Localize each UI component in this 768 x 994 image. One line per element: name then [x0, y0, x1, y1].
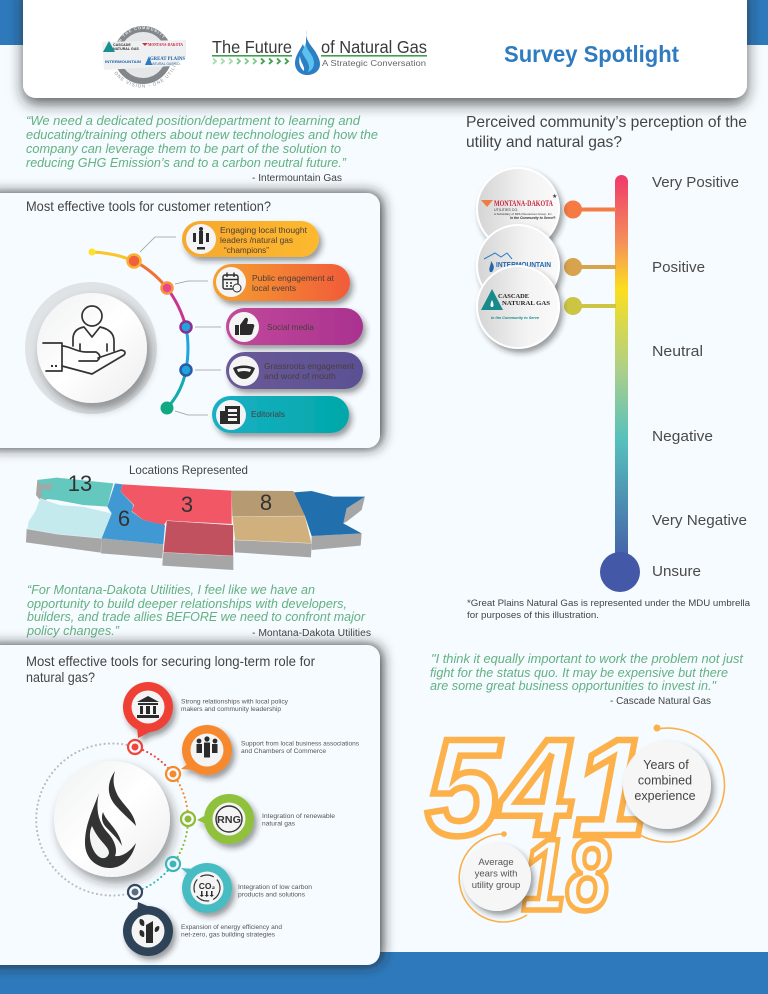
item: grassroots engagement: Grassroots engagement	[264, 361, 355, 371]
map: states represented	[26, 478, 365, 570]
state: minnesota	[294, 491, 365, 536]
heading: securing long-term role	[26, 653, 315, 685]
item: renewable natural gas: natural gas	[262, 820, 295, 828]
scale labels: Neutral	[652, 343, 703, 360]
heading: securing long-term role: Most effective tools for securing long-term role for	[26, 653, 315, 669]
quote: cascade natural gas	[430, 651, 744, 707]
stat: 541 years of combined experience: experience	[634, 789, 696, 803]
logo: utility group seal: MONTANA-DAKOTA	[148, 42, 183, 47]
marker: montana-dakota: MONTANA-DAKOTA	[494, 199, 553, 208]
quote: cascade natural gas: - Cascade Natural Gas	[610, 696, 711, 707]
logo: utility group seal: INTERMOUNTAIN	[105, 59, 141, 64]
state: south dakota	[232, 516, 312, 543]
logo: the future of natural gas: of Natural Gas	[321, 37, 427, 57]
item: social media	[226, 308, 363, 345]
node markers	[128, 740, 195, 899]
stat: 541 years of combined experience: Years of	[643, 758, 689, 772]
heading: customer retention: Most effective tools for customer retention?	[26, 198, 271, 214]
logo: utility group seal: NATURAL GAS CO.	[150, 62, 181, 66]
stat: 541 years of combined experience: 541	[426, 711, 648, 865]
map value: 6: 6	[118, 506, 130, 531]
heading: perceived perception	[466, 114, 747, 151]
timeline arc	[88, 248, 192, 414]
quote: cascade natural gas: fight for the status quo. It may be expensive but there	[430, 665, 728, 680]
heading: securing long-term role: natural gas?	[26, 669, 95, 685]
logo: utility group seal: NATURAL GAS	[113, 47, 139, 51]
item: renewable natural gas: Integration of renewable	[262, 813, 335, 820]
marker: cascade natural gas: CASCADE	[498, 293, 529, 300]
heading: perceived perception: Perceived community’s perception of the	[466, 114, 747, 131]
connectors	[140, 237, 221, 415]
item: renewable natural gas: RNG	[217, 815, 241, 826]
item: thought leaders: leaders /natural gas	[220, 235, 293, 245]
item: energy efficiency	[123, 902, 282, 956]
top blue band	[0, 0, 768, 45]
chart: perception scale	[477, 168, 747, 592]
item: social media: Social media	[267, 322, 314, 332]
map value: 3: 3	[181, 492, 193, 517]
stat: 18 average years with utility group	[459, 818, 610, 932]
quote: intermountain gas	[26, 113, 378, 184]
quote: intermountain gas: - Intermountain Gas	[252, 173, 342, 184]
quote: montana-dakota utilities: policy changes.”	[26, 623, 120, 638]
map value: 13: 13	[68, 471, 92, 496]
item: public engagement: Public engagement at	[252, 273, 335, 283]
quote: intermountain gas: reducing GHG Emission’s and to a carbon neutral future.”	[26, 155, 347, 170]
footnote	[467, 598, 751, 620]
item: policy makers	[123, 682, 289, 738]
state: idaho	[102, 483, 165, 544]
quote: montana-dakota utilities	[26, 582, 371, 639]
scale labels: Unsure	[652, 563, 701, 580]
state: oregon	[27, 498, 112, 538]
scale bar	[600, 175, 640, 592]
scale labels: Very Positive	[652, 174, 739, 191]
logo: utility group seal: CASCADE	[113, 43, 131, 47]
quote: intermountain gas: company can leverage them to be part of the solution to	[26, 141, 341, 156]
marker: montana-dakota: A Subsidiary of MDU Resources Group, Inc.	[494, 212, 553, 216]
logo: utility group seal	[102, 26, 186, 88]
item: business associations	[181, 725, 359, 775]
footnote: for purposes of this illustration.	[467, 610, 599, 620]
item: thought leaders	[182, 221, 319, 257]
header card	[12, 0, 758, 115]
heading: perceived perception: utility and natural gas?	[466, 134, 622, 151]
state: montana	[121, 484, 232, 525]
quote: cascade natural gas: "I think it equally important to work the problem not just	[431, 651, 744, 666]
item: public engagement: local events	[252, 283, 296, 293]
scale labels: Negative	[652, 428, 713, 445]
item: policy makers: Strong relationships with local policy	[181, 698, 289, 706]
logo: utility group seal: GREAT PLAINS	[150, 57, 185, 62]
logo: the future of natural gas: The Future	[212, 37, 292, 57]
scale labels	[652, 174, 747, 580]
state: washington	[37, 478, 113, 507]
stat: 18 average years with utility group: 18	[522, 818, 610, 932]
panel: securing long-term role	[0, 645, 380, 965]
item: low carbon products: Integration of low carbon	[238, 884, 312, 891]
item: editorials	[212, 396, 349, 433]
quote: cascade natural gas: are some great business opportunities to invest in."	[430, 678, 717, 693]
quote: intermountain gas: “We need a dedicated position/department to learning and	[26, 113, 361, 128]
marker: montana-dakota: In the Community to Serve®	[510, 216, 556, 220]
item: energy efficiency: net-zero, gas building strategies	[181, 932, 275, 938]
icon: hand holding person	[25, 282, 157, 414]
map value: 8: 8	[260, 490, 272, 515]
item: grassroots engagement: and word of mouth	[264, 371, 336, 381]
marker: intermountain: INTERMOUNTAIN	[496, 260, 551, 269]
quote: montana-dakota utilities: - Montana-Dakota Utilities	[252, 628, 371, 639]
quote: intermountain gas: educating/training others about new technologies and how the	[26, 127, 378, 142]
item: low carbon products: CO₂	[199, 881, 215, 891]
marker: intermountain	[477, 225, 616, 307]
state: wyoming	[163, 521, 233, 556]
item: thought leaders: “champions”	[224, 245, 269, 255]
stat: 541 years of combined experience: combined	[638, 774, 692, 788]
scale labels: Very Negative	[652, 512, 747, 529]
dotted orbit	[36, 744, 188, 896]
stat: 18 average years with utility group: Average	[478, 857, 514, 868]
heading: locations represented: Locations Represented	[129, 463, 248, 477]
logo: the future of natural gas: A Strategic Conversation	[322, 58, 426, 68]
item: business associations: and Chambers of Commerce	[241, 748, 326, 755]
heading: survey spotlight: Survey Spotlight	[504, 41, 679, 67]
icon: flame	[54, 761, 170, 877]
item: editorials: Editorials	[251, 409, 285, 419]
marker: montana-dakota	[477, 168, 616, 250]
item: low carbon products	[181, 863, 312, 913]
item: public engagement	[213, 264, 350, 301]
marker: cascade natural gas	[477, 266, 616, 348]
item: policy makers: makers and community leadership	[181, 706, 281, 713]
logo: the future of natural gas	[212, 30, 427, 75]
logo: utility group seal: IN THE COMMUNITY	[118, 26, 165, 42]
marker: cascade natural gas: NATURAL GAS	[502, 300, 551, 307]
state: north dakota	[232, 491, 305, 517]
quote: montana-dakota utilities: “For Montana-Dakota Utilities, I feel like we have an	[27, 582, 315, 597]
marker: cascade natural gas: In the Community to Serve	[491, 316, 539, 320]
panel: customer retention	[0, 193, 380, 448]
stat: 18 average years with utility group: utility group	[472, 880, 520, 891]
item: energy efficiency: Expansion of energy efficiency and	[181, 924, 282, 931]
marker: montana-dakota: UTILITIES CO.	[494, 208, 518, 212]
quote: montana-dakota utilities: opportunity to build deeper relationships with developers,	[27, 596, 347, 611]
stat: 18 average years with utility group: years with	[475, 868, 517, 880]
item: thought leaders: Engaging local thought	[220, 225, 308, 235]
marker: montana-dakota: ★	[552, 193, 557, 200]
scale labels: Positive	[652, 259, 705, 276]
bottom blue band	[0, 952, 768, 994]
item: renewable natural gas	[197, 794, 335, 844]
quote: montana-dakota utilities: builders, and trade allies BEFORE we need to confront major	[27, 609, 366, 624]
item: low carbon products: products and solutions	[238, 892, 305, 898]
item: business associations: Support from local business associations	[241, 740, 359, 748]
footnote: *Great Plains Natural Gas is represented under the MDU umbrella	[467, 598, 751, 608]
item: grassroots engagement	[226, 352, 363, 389]
